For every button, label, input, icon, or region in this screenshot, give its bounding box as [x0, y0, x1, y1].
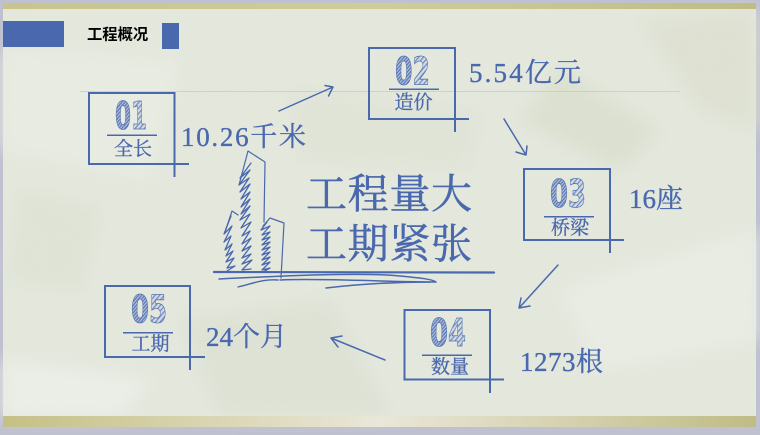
divider 01	[107, 134, 157, 136]
box 04	[404, 310, 504, 393]
ground strokes	[214, 272, 494, 288]
header title: 工程概况	[87, 26, 148, 44]
value 5.54亿元: 5.54亿元	[469, 58, 581, 88]
heading line 1: 工程量大	[306, 171, 472, 217]
divider 04	[422, 354, 472, 356]
value 16座: 16座	[629, 184, 683, 214]
box 02	[369, 48, 469, 132]
item 03	[524, 169, 624, 253]
arrow 03 to 04	[519, 265, 558, 308]
value 10.26千米: 10.26千米	[181, 122, 306, 152]
divider 05	[123, 332, 173, 334]
item 04	[404, 310, 504, 393]
number 01: 01	[115, 94, 147, 138]
box 03	[524, 169, 624, 253]
number 02: 02	[395, 50, 430, 94]
item 05	[105, 286, 205, 370]
number 04: 04	[430, 311, 466, 355]
header	[3, 21, 179, 49]
arrow 04 to 05	[331, 336, 385, 360]
label 全长: 全长	[114, 138, 152, 160]
divider 03	[544, 216, 594, 218]
icon: building sketch	[214, 151, 494, 288]
box 05	[105, 286, 205, 370]
arrow 01 to 02	[279, 86, 333, 111]
number 05: 05	[131, 288, 167, 332]
heading line 2: 工期紧张	[306, 221, 472, 267]
item 02	[369, 48, 469, 132]
bottom gold bar	[3, 416, 756, 427]
header block left	[3, 21, 64, 47]
label 数量: 数量	[431, 356, 469, 378]
box 01	[89, 93, 189, 177]
header block right	[162, 23, 179, 49]
label 工期: 工期	[131, 333, 170, 355]
divider 02	[389, 88, 439, 90]
label 造价: 造价	[394, 92, 433, 114]
top gold bar	[3, 3, 756, 9]
number 03: 03	[550, 172, 586, 216]
value 1273根: 1273根	[520, 347, 603, 377]
label 桥梁: 桥梁	[551, 217, 590, 239]
arrow 02 to 03	[504, 119, 527, 155]
item 01	[89, 93, 189, 177]
main heading	[306, 171, 472, 267]
value 24个月: 24个月	[206, 322, 287, 352]
